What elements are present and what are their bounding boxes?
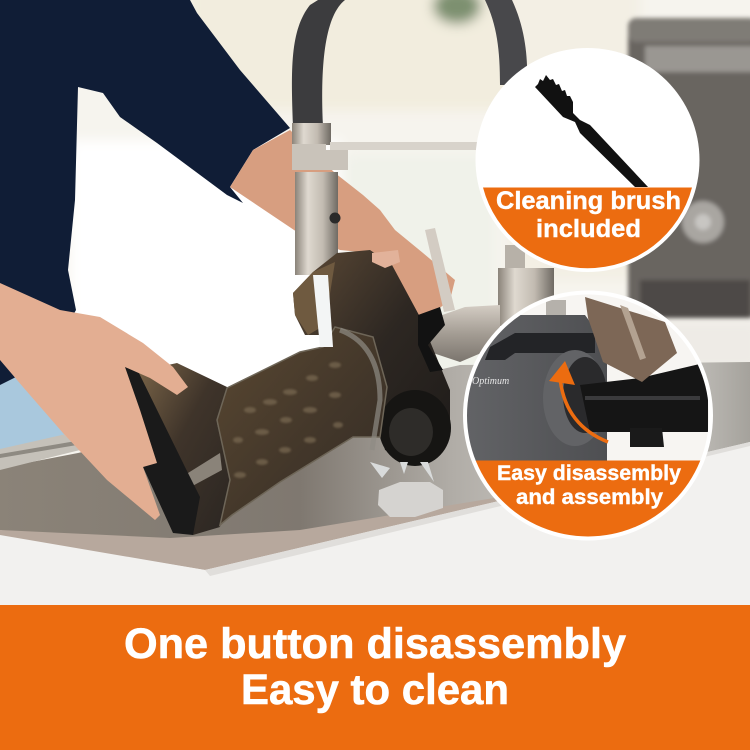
callout: cleaning brush: included [536, 215, 641, 243]
jeans [0, 375, 75, 449]
right arm and hand [230, 130, 455, 325]
banner heading: Easy to clean [241, 666, 509, 714]
banner [0, 605, 750, 750]
water drips [370, 462, 434, 482]
banner heading: One button disassembly [124, 620, 626, 668]
torso and sleeve [0, 0, 290, 390]
left arm and hand [0, 283, 188, 520]
callout: disassembly: and assembly [516, 485, 663, 509]
callout: disassembly [460, 290, 720, 545]
logo: Optimum [472, 376, 509, 387]
icon: brush [535, 75, 648, 187]
juicer in background [628, 18, 750, 318]
faucet [292, 0, 554, 362]
juicer cup lower with water [123, 327, 387, 535]
caption: Easy disassembly [497, 461, 681, 485]
juicer cup upper [293, 250, 451, 466]
arrow [549, 361, 608, 442]
sink [0, 362, 750, 605]
thumb right [372, 250, 400, 268]
water stream [313, 275, 333, 347]
banner heading [124, 620, 626, 714]
callout: cleaning brush [476, 48, 700, 272]
caption: Cleaning brush [496, 187, 681, 215]
